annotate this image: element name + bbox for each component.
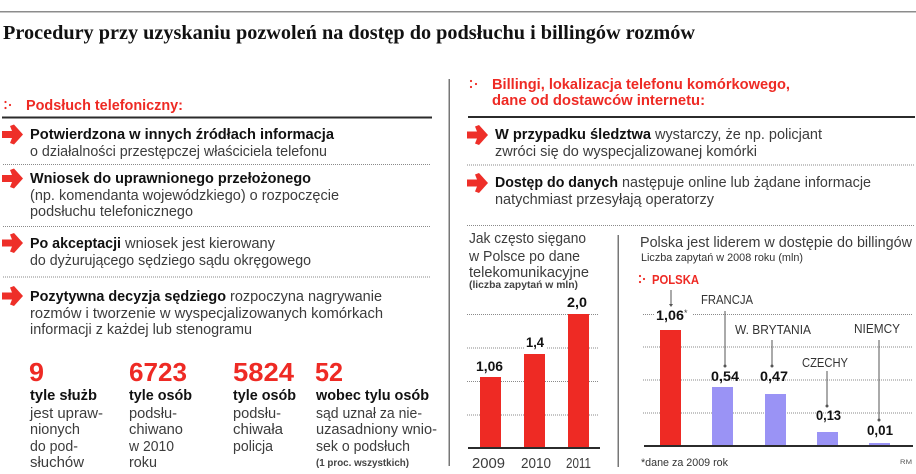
stat: 6723: podsłu- [129, 406, 177, 422]
bar: Polska: * [684, 308, 688, 318]
bar 2010: 1,4 [526, 334, 544, 350]
stat: 6723: chiwano [129, 422, 183, 438]
bar 2009 [472, 358, 505, 472]
section heading: billingi: Billingi, lokalizacja telefonu komórkowego, [492, 77, 790, 93]
stat: 5824: 5824 [233, 357, 295, 387]
step 3: Po akceptacji [30, 236, 121, 252]
step 3: do dyżurującego sędziego sądu okręgowego [30, 253, 311, 269]
billing step 1: zwróci się do wyspecjalizowanej komórki [495, 144, 757, 160]
stat: 9: tyle służb [30, 388, 97, 404]
stat: 9: do pod- [30, 439, 78, 455]
panel: podsłuch telefoniczny [2, 98, 437, 471]
stat: 9: słuchów [30, 455, 85, 471]
chart heading: leader [640, 235, 913, 264]
bar: Czechy: 0,13 [816, 407, 841, 423]
step 4: Pozytywna decyzja sędziego [30, 289, 226, 305]
bar: W. Brytania [735, 323, 812, 446]
bar 2010 [521, 334, 551, 472]
stat: 5824: chiwała [233, 422, 284, 438]
billing step 2: Dostęp do danych [495, 175, 618, 191]
billing step 2: następuje online lub żądane informacje [622, 175, 871, 191]
bar: W. Brytania: W. BRYTANIA [735, 323, 812, 337]
step 1 [2, 124, 335, 160]
section heading: podsłuch: Podsłuch telefoniczny: [26, 98, 183, 114]
stat: 52: (1 proc. wszystkich) [316, 458, 409, 469]
stat: 52: sek o podsłuch [316, 439, 410, 455]
credit: RM [900, 460, 912, 466]
step 3: wniosek jest kierowany [124, 236, 276, 252]
stat: 52 [315, 357, 437, 469]
stat: 52: 52 [315, 357, 343, 387]
bar: Francja: 0,54 [711, 368, 739, 384]
stat: 6723 [128, 357, 192, 471]
step 1: o działalności przestępczej właściciela telefonu [30, 144, 327, 160]
chart heading: leader: Polska jest liderem w dostępie do billingów [640, 235, 913, 251]
bar: Polska: 1,06 [656, 307, 684, 323]
chart heading: Poland: (liczba zapytań w mln) [469, 280, 578, 291]
bar: Polska [639, 273, 699, 446]
bar: Niemcy [854, 322, 901, 446]
step 4: rozpoczyna nagrywanie [230, 289, 382, 305]
stat: 9: nionych [30, 422, 80, 438]
section heading: billingi [470, 77, 790, 109]
stat: 6723: 6723 [129, 357, 187, 387]
step 4: informacji z każdej lub stenogramu [30, 322, 252, 338]
step 1: Potwierdzona w innych źródłach informacja [30, 127, 335, 143]
chart heading: Poland: Jak często sięgano [469, 231, 586, 247]
bar: Polska: POLSKA [652, 273, 699, 287]
chart: countries comparison [639, 235, 913, 469]
bar 2009: 1,06 [476, 358, 503, 374]
stat: 9: jest upraw- [29, 406, 103, 422]
stat: 6723: w 2010 [128, 439, 174, 455]
title: Procedury przy uzyskaniu pozwoleń na dostęp do podsłuchu i billingów rozmów [3, 23, 695, 44]
bar: Francja [701, 293, 754, 446]
step 2: Wniosek do uprawnionego przełożonego [30, 171, 311, 187]
step 3 [2, 233, 311, 269]
billing step 1 [467, 125, 822, 160]
stat: 6723: tyle osób [129, 388, 192, 404]
stat: 5824 [233, 357, 296, 455]
bar: Niemcy: NIEMCY [854, 322, 901, 336]
stat: 5824: tyle osób [233, 388, 296, 404]
bar 2011: 2011 [566, 456, 591, 472]
panel: billingi [467, 77, 915, 226]
bar 2009: 2009 [472, 456, 505, 472]
step 2: (np. komendanta wojewódzkiego) o rozpoczęcie [30, 188, 339, 204]
chart heading: Poland [468, 231, 589, 291]
chart heading: Poland: w Polsce po dane [468, 249, 580, 265]
step 4 [2, 286, 383, 338]
footnote: *dane za 2009 rok [641, 457, 728, 469]
bar: Niemcy: 0,01 [867, 422, 893, 438]
step 2 [2, 168, 339, 220]
bar: W. Brytania: 0,47 [760, 368, 788, 384]
stat: 52: sąd uznał za nie- [316, 406, 422, 422]
bar 2011 [566, 294, 591, 472]
bar 2011: 2,0 [567, 294, 587, 310]
stat: 6723: roku [129, 455, 157, 471]
billing step 1: W przypadku śledztwa [495, 127, 652, 143]
section heading: billingi: dane od dostawców internetu: [492, 93, 705, 109]
bar: Czechy [802, 356, 849, 446]
bar: Czechy: CZECHY [802, 356, 849, 370]
bar: Francja: FRANCJA [701, 293, 754, 307]
stat: 9 [29, 357, 103, 471]
stat: 52: wobec tylu osób [315, 388, 429, 404]
chart heading: leader: Liczba zapytań w 2008 roku (mln) [641, 252, 803, 264]
bar 2010: 2010 [521, 456, 551, 472]
stat: 9: 9 [29, 357, 44, 387]
step 2: podsłuchu telefonicznego [30, 204, 193, 220]
billing step 1: wystarczy, że np. policjant [654, 127, 822, 143]
stat: 5824: podsłu- [233, 406, 281, 422]
stat: 5824: policja [233, 439, 274, 455]
billing step 2 [467, 173, 871, 208]
chart: requests per year [467, 231, 600, 472]
stat: 52: uzasadniony wnio- [316, 422, 437, 438]
step 4: rozmów i tworzenie w wyspecjalizowanych komórkach [30, 306, 383, 322]
chart heading: Poland: telekomunikacyjne [469, 265, 589, 281]
billing step 2: natychmiast przesyłają operatorzy [495, 192, 715, 208]
